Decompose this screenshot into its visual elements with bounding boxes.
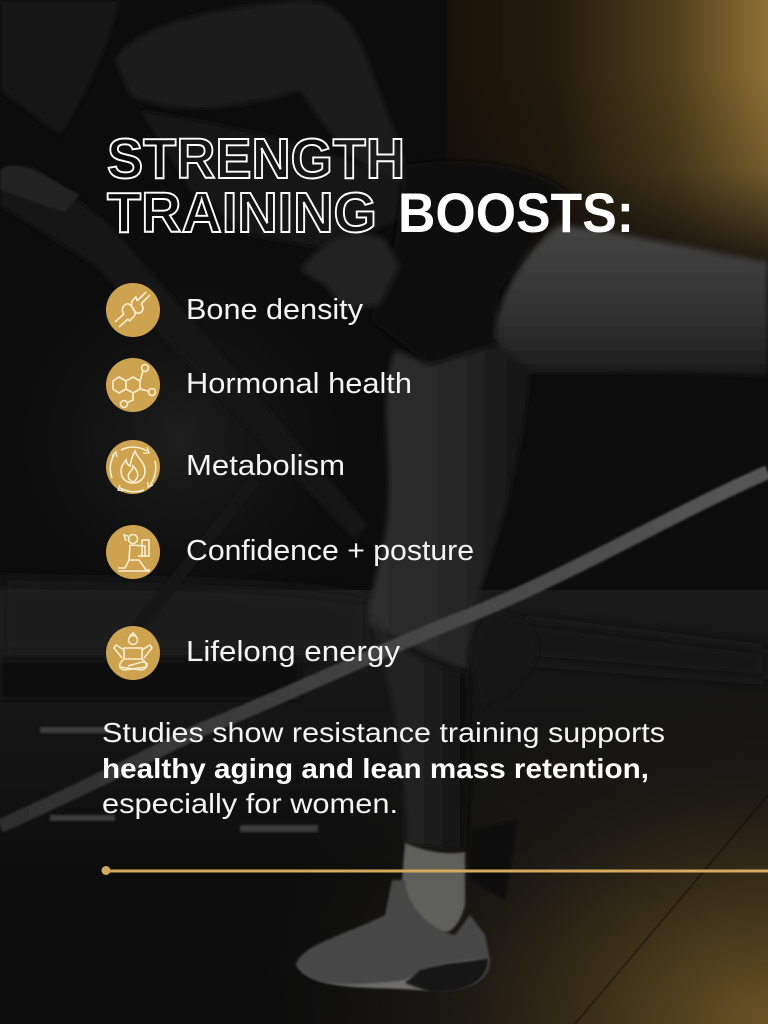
body line 2, bold: healthy aging and lean mass retention,	[102, 753, 649, 784]
body text	[102, 717, 665, 819]
body line 1: Studies show resistance training supports	[102, 717, 665, 748]
benefit: metabolism	[106, 440, 345, 494]
icon: kneeling lifter	[106, 525, 160, 579]
benefit: bone density	[106, 283, 364, 337]
benefit: lifelong energy	[106, 626, 401, 680]
icon: molecule	[106, 358, 160, 412]
title line: TRAINING (outlined): TRAINING	[107, 181, 377, 245]
label: hormonal health: Hormonal health	[186, 368, 412, 400]
title word: BOOSTS: BOOSTS:	[398, 181, 634, 244]
icon: flame with cycle arrows	[106, 440, 160, 494]
label: lifelong energy: Lifelong energy	[186, 636, 401, 668]
benefit: confidence and posture	[106, 525, 474, 579]
benefit: hormonal health	[106, 358, 412, 412]
gold divider with dot	[102, 866, 768, 875]
label: confidence and posture: Confidence + posture	[186, 535, 474, 567]
label: bone density: Bone density	[186, 294, 364, 326]
body line 3: especially for women.	[102, 788, 398, 819]
icon: joint	[106, 283, 160, 337]
title	[107, 127, 634, 245]
title line: STRENGTH (outlined): STRENGTH	[107, 127, 405, 191]
label: metabolism: Metabolism	[186, 450, 345, 482]
icon: meditating figure	[106, 626, 160, 680]
